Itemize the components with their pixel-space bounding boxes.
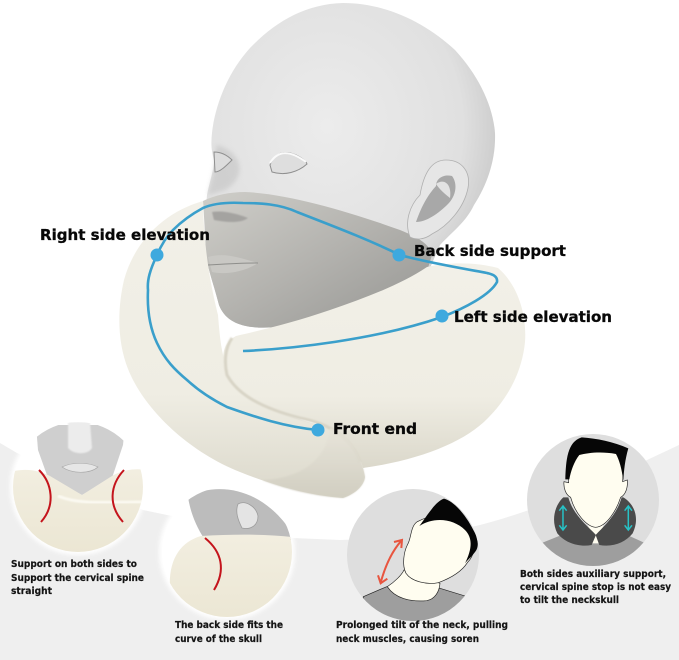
- caption: auxiliary support: Both sides auxiliary support,: [520, 569, 666, 580]
- caption: back side: [175, 620, 283, 645]
- caption: both sides: straight: [11, 586, 52, 597]
- caption: auxiliary support: [520, 569, 672, 606]
- caption: auxiliary support: to tilt the neckskull: [520, 595, 619, 606]
- caption: both sides: [11, 559, 144, 597]
- caption: both sides: Support on both sides to: [11, 559, 137, 570]
- pillow right lobe: [223, 263, 525, 468]
- marker: right side: [150, 248, 164, 262]
- brow shading: [208, 145, 240, 195]
- illustration: head and neck pillow: [119, 3, 525, 498]
- red curves: [39, 470, 124, 522]
- caption: back side: The back side fits the: [175, 620, 283, 631]
- caption: back side: curve of the skull: [175, 634, 262, 645]
- marker: front end: [312, 424, 324, 436]
- circle panel: tilted neck: [347, 489, 479, 623]
- caption: tilted neck: [336, 620, 508, 645]
- label: back side support: Back side support: [414, 242, 567, 260]
- marker: back side: [392, 248, 406, 262]
- circle panel: auxiliary support: [527, 434, 659, 570]
- marker: left side: [436, 310, 448, 322]
- caption: auxiliary support: cervical spine stop is not easy: [520, 582, 672, 593]
- head lower shade through pillow: [203, 192, 432, 328]
- cyan double arrows: [559, 506, 632, 530]
- pillow seam shadow: [225, 338, 360, 462]
- eyes: [214, 152, 307, 174]
- label: front end: Front end: [333, 420, 417, 438]
- mouth and nose: [208, 212, 258, 273]
- red double arrow: [378, 540, 402, 583]
- label: right side elevation: Right side elevation: [40, 226, 210, 244]
- circle panel: both sides support: [10, 419, 150, 555]
- label: left side elevation: Left side elevation: [454, 308, 612, 326]
- caption: both sides: Support the cervical spine: [11, 573, 144, 584]
- caption: tilted neck: neck muscles, causing soren: [336, 634, 479, 645]
- head: [205, 3, 495, 328]
- caption: tilted neck: Prolonged tilt of the neck, pulling: [336, 620, 508, 631]
- background band: [0, 443, 679, 660]
- ear: [408, 160, 469, 239]
- blue outline curve: [148, 203, 497, 430]
- pillow front tip: [262, 428, 365, 498]
- circle panel: back side: [159, 484, 295, 625]
- pillow left lobe: [119, 201, 365, 498]
- red curve: [205, 538, 221, 590]
